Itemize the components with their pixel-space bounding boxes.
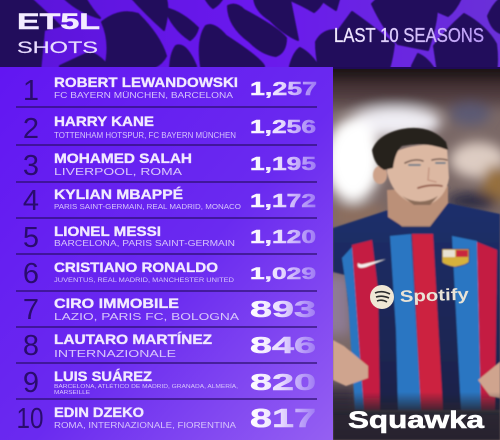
row 5 bbox=[23, 222, 316, 254]
eyes, brows, nose and mouth bbox=[405, 159, 447, 188]
row 1: 1,257 bbox=[250, 79, 317, 99]
row 2: TOTTENHAM HOTSPUR, FC BAYERN MÜNCHEN bbox=[54, 131, 236, 140]
jersey bbox=[333, 203, 500, 410]
row 8: 8 bbox=[23, 330, 39, 362]
row 3: LIVERPOOL, ROMA bbox=[54, 166, 182, 178]
row 6: CRISTIANO RONALDO bbox=[54, 259, 218, 275]
stubble bbox=[402, 196, 438, 205]
row 1 bbox=[23, 74, 317, 107]
row 7 bbox=[23, 294, 316, 326]
swoosh bbox=[358, 259, 386, 268]
row 4: PARIS SAINT-GERMAIN, REAL MADRID, MONACO bbox=[54, 202, 241, 211]
row 8 bbox=[23, 330, 316, 362]
stripes bbox=[342, 234, 497, 410]
row 9: 9 bbox=[23, 367, 39, 399]
row 10: 817 bbox=[250, 403, 316, 433]
row 3: 3 bbox=[23, 150, 39, 182]
subtitle: SHOTS bbox=[17, 39, 98, 57]
left hand bbox=[333, 340, 368, 386]
row 9 bbox=[23, 367, 316, 399]
lower dark fade bbox=[333, 392, 500, 440]
row 1: FC BAYERN MÜNCHEN, BARCELONA bbox=[54, 90, 233, 100]
row 5: BARCELONA, PARIS SAINT-GERMAIN bbox=[54, 238, 235, 248]
row 6: 6 bbox=[23, 258, 39, 290]
row 3: MOHAMED SALAH bbox=[54, 150, 192, 166]
row 9: BARCELONA, ATLÉTICO DE MADRID, GRANADA, ALMERÍA, bbox=[54, 383, 238, 390]
row 4 bbox=[23, 185, 316, 217]
row 2: 2 bbox=[23, 113, 39, 145]
spotify logo bbox=[370, 285, 470, 309]
row 9: MARSEILLE bbox=[54, 390, 91, 396]
row 4: KYLIAN MBAPPÉ bbox=[54, 186, 183, 202]
row 7: LAZIO, PARIS FC, BOLOGNA bbox=[54, 311, 239, 323]
row 3: 1,195 bbox=[250, 154, 316, 174]
row 1: ROBERT LEWANDOWSKI bbox=[54, 74, 238, 90]
squawka logo: Squawka bbox=[348, 407, 485, 434]
row 1: 1 bbox=[23, 75, 39, 107]
row 5: LIONEL MESSI bbox=[54, 223, 161, 239]
face bbox=[387, 145, 449, 205]
row 2: HARRY KANE bbox=[54, 113, 154, 129]
spotify logo: Spotify bbox=[400, 286, 470, 306]
row 2: 1,256 bbox=[250, 117, 316, 137]
row 7: 7 bbox=[23, 294, 39, 326]
row 10: ROMA, INTERNAZIONALE, FIORENTINA bbox=[54, 420, 236, 430]
row 3 bbox=[23, 150, 316, 182]
row 4: 1,172 bbox=[250, 191, 316, 211]
row 7: 893 bbox=[250, 296, 316, 322]
right hand bbox=[478, 362, 500, 398]
row 8: LAUTARO MARTÍNEZ bbox=[54, 331, 212, 347]
row 10: EDIN DZEKO bbox=[54, 404, 144, 420]
row 2 bbox=[23, 113, 316, 145]
row 6: 1,029 bbox=[250, 264, 316, 283]
row 10: 10 bbox=[16, 403, 44, 435]
row 10 bbox=[16, 403, 316, 435]
ear bbox=[373, 166, 387, 184]
row 5: 1,120 bbox=[250, 227, 316, 247]
row 4: 4 bbox=[23, 185, 39, 217]
row 8: INTERNAZIONALE bbox=[54, 348, 176, 360]
row 9: LUIS SUÁREZ bbox=[54, 368, 152, 384]
crest bbox=[442, 249, 469, 267]
row 8: 846 bbox=[250, 332, 316, 358]
panel: ranking list bbox=[0, 67, 333, 440]
hair bbox=[372, 128, 448, 170]
row 7: CIRO IMMOBILE bbox=[54, 295, 179, 311]
player photo bbox=[333, 69, 500, 440]
row 6: JUVENTUS, REAL MADRID, MANCHESTER UNITED bbox=[54, 277, 234, 284]
row 5: 5 bbox=[23, 222, 39, 254]
title: ET5L bbox=[17, 9, 100, 34]
neck bbox=[387, 186, 448, 226]
header band with pattern bbox=[32, 0, 500, 67]
row 6 bbox=[23, 258, 316, 290]
row 9: 820 bbox=[250, 369, 316, 395]
